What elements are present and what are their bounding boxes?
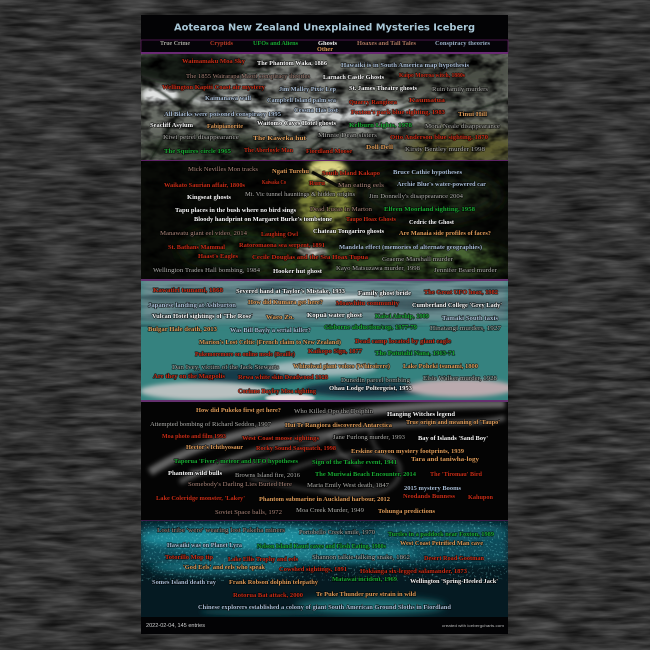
- entry: Kawatiri tsunami, 1868: [153, 287, 223, 294]
- entry: Kiwi petrel disappearance: [163, 134, 239, 141]
- entry: Attempted bombing of Richard Seddon, 1907: [150, 421, 271, 428]
- entry: Ohau Lodge Poltergeist, 1953: [329, 385, 412, 392]
- panel 5: deep water: [140, 521, 508, 617]
- entry: Moa Creek Murder, 1949: [296, 507, 364, 514]
- entry: The Muriwai Beach Encounter, 2014: [315, 471, 417, 478]
- entry: Severed hand at Taylor's Mistake, 1933: [236, 288, 345, 295]
- entry: Ruin family murders: [432, 86, 489, 93]
- entry: Mt. Vic tunnel hauntings & hidden origins: [245, 191, 356, 198]
- entry: Whiroiwai giant voices (Whiroirere): [293, 363, 390, 370]
- entry: Kaipo Moeroa witch, 1880s: [399, 72, 465, 79]
- entry: Ruru: [309, 180, 326, 187]
- entry: Mandela effect (memories of alternate geographies): [339, 244, 482, 251]
- entry: Tinui Hill: [458, 111, 487, 118]
- entry: Neodands Bunness: [403, 493, 456, 500]
- entry: Shannon talkie-talking snake, 1862: [312, 554, 410, 561]
- entry: Mick Nevilles Mon tracks: [188, 166, 259, 173]
- entry: Hector's Ichthyosaur: [186, 444, 243, 451]
- entry: Japanese landing at Ashburton: [148, 302, 237, 309]
- entry: Phantom submarine in Auckland harbour, 2012: [259, 496, 390, 503]
- legend: Conspiracy theories: Conspiracy theories: [435, 41, 491, 47]
- entry: Minnie Dean sisters: [318, 132, 378, 139]
- entry: Hui Te Rangiora discovered Antarctica: [285, 422, 393, 429]
- entry: South Island Kakapo: [322, 170, 380, 177]
- entry: Kaimanawa wall: [205, 95, 251, 102]
- entry: Kaumatua: [409, 97, 446, 104]
- entry: Totorillo Mop tip: [165, 554, 214, 561]
- entry: Kaikopo Sign, 1877: [308, 348, 362, 355]
- entry: Somebody's Darling Lies Buried Here: [188, 481, 292, 488]
- entry: Tamaki South taxis: [442, 315, 499, 322]
- entry: Dan Ivey, victim of the Jack Stewarts: [172, 364, 280, 371]
- entry: Rocky Sound Sasquatch, 1998: [256, 445, 336, 452]
- entry: Doll Dell: [366, 144, 393, 151]
- entry: Kahupon: [468, 494, 493, 501]
- entry: St. James Theatre ghosts: [349, 85, 418, 92]
- entry: Maria Emily West death, 1847: [307, 482, 389, 489]
- entry: Kayo Matsuzawa murder, 1998: [336, 265, 420, 272]
- entry: Jane Furlong murder, 1993: [333, 434, 405, 441]
- entry: Lake Coleridge monster, 'Lakey': [156, 495, 245, 502]
- entry: The 'Tiromau' Bird: [430, 471, 482, 478]
- entry: Tara and taniwha-logy: [411, 456, 480, 463]
- entry: Jennifer Beard murder: [434, 267, 498, 274]
- entry: Lake Poheki tsunami, 1800: [403, 363, 478, 370]
- entry: Manawatu giant eel video, 2014: [160, 230, 248, 237]
- entry: Are they on the Magpolis: [153, 373, 226, 380]
- entry: Man eating eels: [338, 182, 385, 189]
- entry: Jim Donnelly's disappearance 2004: [369, 193, 464, 200]
- entry: Marion's Lost Celtic (French claim to New Zealand): [199, 339, 341, 346]
- entry: The Squires circle 1965: [164, 148, 231, 155]
- entry: Phantom wild bulls: [168, 470, 223, 477]
- panel 3: sea: [140, 276, 515, 402]
- entry: Otto Anderson blue sighting, 1870: [390, 134, 488, 141]
- category legend: [141, 40, 508, 54]
- entry: Elfeen Moorland sighting, 1958: [384, 206, 475, 213]
- entry: Corinne Bayley Moa sighting: [238, 388, 317, 395]
- entry: Elsie Walker murder, 1928: [423, 375, 497, 382]
- entry: Tapu places in the bush where no bird sings: [175, 207, 297, 214]
- entry: Jim Malley Pixie Lep: [279, 86, 336, 93]
- entry: Moawhitu community: [336, 300, 400, 307]
- panel 1: forest and sky: [141, 54, 508, 160]
- entry: Kelburn Lights, 1978: [349, 122, 412, 129]
- divider bar 1: [141, 160, 508, 162]
- legend: Ghosts: Ghosts: [318, 41, 338, 47]
- entry: 'God Eels' and eels who speak: [183, 564, 266, 571]
- entry: Moa photo and film 1993: [162, 433, 226, 440]
- entry: Ngati Turehu: [272, 168, 310, 175]
- entry: Kopuā water ghost: [307, 312, 363, 319]
- title: Aotearoa New Zealand Unexplained Mysteries Iceberg: [174, 22, 475, 34]
- entry: Haast's Eagles: [198, 253, 239, 260]
- entry: Fabipianorite: [207, 123, 243, 130]
- entry: Hinatangi murders, 1927: [430, 325, 501, 332]
- entry: Are Manaia side profiles of faces?: [399, 230, 491, 237]
- entry: Cessna Has lost: [294, 107, 339, 114]
- entry: Campbell Island palm sea: [267, 97, 337, 104]
- entry: The Patutahi Nana, 1963-71: [375, 350, 455, 357]
- entry: Foxton's park blue sighting, 1983: [351, 109, 445, 116]
- entry: Te Puke Thunder pure strain in wild: [316, 591, 416, 598]
- entry: Wellington Kapiti Coast air mystery: [162, 84, 266, 91]
- entry: The Phantom Waka, 1886: [257, 60, 327, 67]
- entry: Archie Blue's water-powered car: [397, 181, 486, 188]
- entry: Kingseat ghosts: [187, 194, 232, 201]
- entry: Matawai incident, 1969: [332, 576, 397, 583]
- entry: Mona Neale disappearance: [425, 123, 500, 130]
- legend: Cryptids: Cryptids: [210, 41, 234, 47]
- panel 2: dark bush: [141, 158, 510, 282]
- entry: Waitomo Caves Hotel ghosts: [257, 120, 337, 127]
- entry: Waeo Zo.: [266, 314, 294, 321]
- entry: Family ghost bride: [358, 290, 411, 297]
- entry: Cowshed sightings, 1891: [279, 566, 347, 573]
- entry: Lost tribe 'were' wearing lost Pakeha miners: [157, 527, 286, 534]
- entry: Nelson Island Kauri caves and Flesh Eating, 1980s: [257, 543, 387, 550]
- entry: Tohunga predictions: [378, 508, 436, 515]
- entry: Dead Lucas in Marton: [310, 206, 373, 213]
- footer date and entry count: 2022-02-04, 145 entries: [146, 623, 205, 629]
- entry: West Coast moose sightings: [242, 435, 320, 442]
- entry: Hokianga six-legged salamander, 1873: [360, 568, 467, 575]
- entry: Hawaiki was on Planet Lyra: [167, 542, 243, 549]
- legend: True Crime: True Crime: [160, 41, 190, 47]
- entry: Cedric the Ghost: [409, 219, 455, 226]
- entry: All Blacks were poisoned conspiracy 1995: [164, 111, 281, 118]
- entry: Waimamaku Moa Sky: [182, 58, 246, 65]
- entry: The 1855 Wairarapa Maori conspiracy theories: [186, 73, 311, 80]
- entry: Rewa white skin Deadwood 1928: [238, 374, 328, 381]
- entry: Hooker hut ghost: [273, 268, 323, 275]
- entry: Chateau Tongariro ghosts: [313, 228, 385, 235]
- entry: Taupo Hoax Ghosts: [346, 216, 397, 223]
- entry: Somes Island death ray: [152, 579, 217, 586]
- entry: Pukemoremore on online mode (Braille): [195, 351, 295, 358]
- entry: Bulgar Hale death, 2013: [148, 326, 217, 333]
- entry: 2015 mystery Booms: [404, 485, 462, 492]
- entry: Wellington 'Spring-Heeled Jack': [410, 578, 498, 585]
- entry: Who Killed Opo the Dolphin: [294, 408, 374, 415]
- panel 4: koru fern: [141, 402, 508, 520]
- entry: Vulcan Hotel sightings of 'The Rose': [152, 313, 253, 320]
- entry: Seacliff Asylum: [150, 122, 194, 129]
- entry: Ratoromaona sea serpent, 1891: [239, 242, 325, 249]
- entry: Taporua 'Fiver', meteor and UFO hypotheses: [174, 458, 299, 465]
- entry: Waikato Saurian affair, 1800s: [164, 182, 246, 189]
- entry: Dunedin parcel bombing: [341, 377, 411, 384]
- entry: The Great UFO hoax, 1982: [424, 289, 498, 296]
- entry: Kaiwi Airship, 1909: [375, 313, 429, 320]
- legend: Other: Other: [317, 47, 333, 53]
- legend: Hoaxes and Tall Tales: Hoaxes and Tall Tales: [357, 41, 417, 47]
- entry: The Aberfoyle Man: [244, 147, 293, 154]
- entry: How did Pukeko first get here?: [196, 407, 281, 414]
- entry: Browns Island fire, 2016: [235, 472, 300, 479]
- entry: Frank Robson dolphin telepathy: [229, 579, 319, 586]
- entry: Kaiwaka Co: [262, 179, 286, 186]
- footer credit: created with icebergcharts.com: [442, 623, 505, 628]
- entry: Quarry Rangiora: [349, 99, 398, 106]
- divider bar 4: [141, 520, 508, 521]
- entry: St. Bathans Mammal: [168, 244, 225, 251]
- entry: Larnach Castle Ghosts: [323, 74, 385, 81]
- divider bar 3: [141, 400, 508, 402]
- entry: Desert Road Gootman: [424, 555, 484, 562]
- entry: How did Kumara get here?: [248, 299, 323, 306]
- entry: Bruce Cathie hypotheses: [393, 169, 463, 176]
- entry: Soviet Space balls, 1972: [215, 509, 282, 516]
- entry: Sign of the Takahe event, 1941: [312, 459, 397, 466]
- entry: Cecile Douglas and the Sea Hoax Tupua: [252, 254, 369, 261]
- entry: Hanging Witches legend: [387, 411, 456, 418]
- iceberg chart card: [125, 15, 525, 634]
- entry: Portobello Creek smile, 1970: [299, 529, 375, 536]
- entry: Graeme Marshall murder: [382, 256, 454, 263]
- entry: Gisborne abduction/cop, 1977-79: [324, 324, 417, 331]
- entry: Was Bill Bayly a serial killer?: [230, 327, 311, 334]
- entry: Laughing Owl: [261, 231, 298, 238]
- entry: Kirsty Bentley murder 1998: [405, 146, 485, 153]
- entry: The Kaweka hut: [253, 135, 307, 142]
- entry: Chinese explorers established a colony of giant South American Ground Sloths in Fiordland: [198, 604, 452, 611]
- legend: UFOs and Aliens: UFOs and Aliens: [253, 41, 299, 47]
- divider bar 2: [141, 279, 508, 281]
- entry: Wellington Trades Hall bombing, 1984: [153, 267, 261, 274]
- entry: Rotorua Bat attack, 2000: [233, 592, 303, 599]
- entry: Bloody handprint on Margaret Burke's tombstone: [194, 216, 332, 223]
- entry: True origin and meaning of 'Taupo': [406, 419, 500, 426]
- entry: Fiordland Moose: [306, 148, 352, 155]
- entry: Bay of Islands 'Sand Boy': [418, 435, 488, 442]
- entry: Lake Ellis Trophy and eels: [228, 556, 299, 563]
- entry: Hawaiki is in South America map hypothesis: [341, 62, 470, 69]
- entry: Cumberland College 'Grey Lady': [412, 302, 502, 309]
- entry: Erskine canyon mystery footprints, 1939: [351, 448, 464, 455]
- entry: Turtles in a paddock near Foxton, 1989: [388, 531, 494, 538]
- entry: West Coast Petrified Man cave: [400, 540, 483, 547]
- entry: Dead camp located by giant eagle: [355, 338, 451, 345]
